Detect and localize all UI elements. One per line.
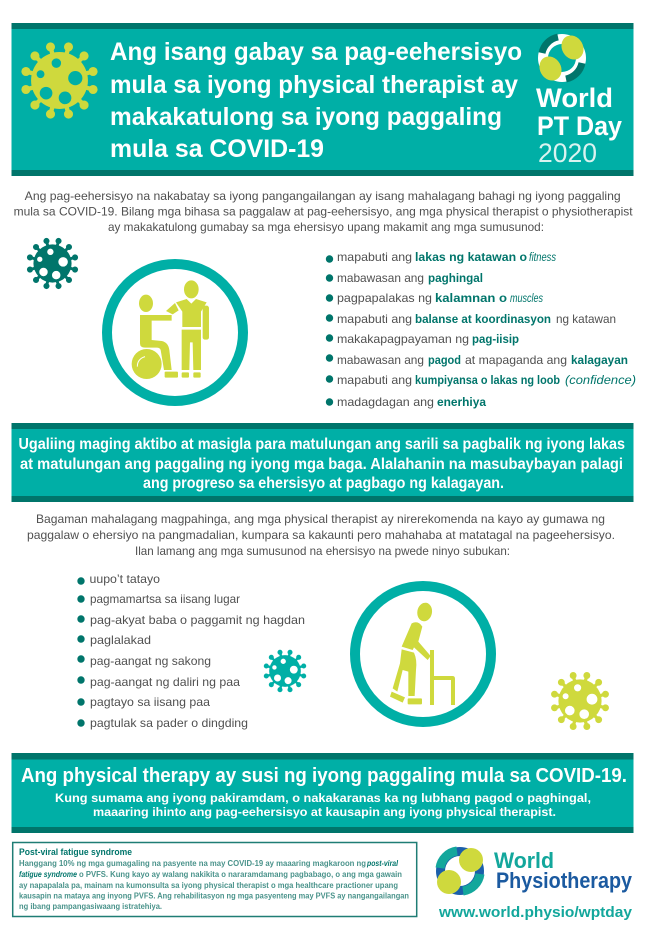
- logo: World Physiotherapy: [436, 847, 633, 895]
- list: exercises: pag-aangat ng sakong: [90, 654, 211, 668]
- body text: fatigue syndrome: [19, 869, 77, 879]
- item: paghingal: [326, 271, 483, 285]
- item: confidence: (confidence): [565, 373, 636, 387]
- logo: World Physiotherapy: World: [494, 848, 554, 873]
- item: balanse: [326, 312, 616, 326]
- intro text: ay makakatulong gumabay sa mga ehersisyo upang makamit ang mga sumusunod:: [108, 220, 544, 234]
- item: paghingal: mabawasan ang: [337, 271, 424, 285]
- panel: key message banner: Kung sumama ang iyong pakiramdam, o nakakaranas ka ng lubhang pagod o paghingal,: [55, 791, 591, 805]
- logo: World Physiotherapy: Physiotherapy: [496, 868, 633, 893]
- item: muscles: pagpapalakas ng: [337, 291, 432, 305]
- icon: person walking with chair in circle: [355, 586, 491, 722]
- text: exercise intro: Bagaman mahalagang magpahinga, ang mga physical therapist ay nirerekomenda na kayo ay gumawa ng: [36, 512, 605, 526]
- item: muscles: muscles: [510, 291, 543, 305]
- item: pagod at kalagayan: kalagayan: [571, 353, 628, 367]
- title: [110, 38, 522, 163]
- item: balanse: balanse at koordinasyon: [415, 312, 551, 326]
- logo: World PT Day 2020: [535, 31, 622, 168]
- intro text: Ang pag-eehersisyo na nakabatay sa iyong pangangailangan ay isang mahalagang bahagi ng iyong paggaling: [25, 189, 621, 203]
- list: benefits: [326, 250, 636, 409]
- text: exercise intro: paggalaw o ehersiyo na pangmadalian, kumpara sa kakaunti pero mahahaba at matatagal na pageehersisyo.: [27, 528, 615, 542]
- heading: Post-viral fatigue syndrome: [19, 847, 132, 857]
- panel: key message banner: [12, 753, 634, 833]
- item: fitness: mapabuti ang: [337, 250, 412, 264]
- item: pag-iisip: makakapagpayaman ng: [337, 332, 469, 346]
- item: muscles: [326, 291, 543, 305]
- item: balanse: ng katawan: [556, 312, 616, 326]
- item: balanse: mapabuti ang: [337, 312, 412, 326]
- icon: therapist with patient in circle: [107, 264, 243, 401]
- text: exercise intro: Ilan lamang ang mga sumusunod na ehersisyo na pwede ninyo subukan:: [135, 544, 510, 558]
- body text: post-viral: [366, 858, 398, 868]
- logo: World PT Day 2020: PT Day: [537, 111, 622, 141]
- title: makakatulong sa iyong paggaling: [110, 103, 502, 131]
- body text: [19, 858, 409, 911]
- item: confidence: [326, 373, 636, 387]
- body text: ng ibang pampangasiwaang istratehiya.: [19, 901, 162, 911]
- body text: o PVFS. Kung kayo ay walang nakikita o nararamdamang pagbabago, o ang mga gawain: [79, 869, 402, 879]
- body text: ay napapalala pa, mainam na kumonsulta sa iyong physical therapist o mga healthcare practioner upang: [19, 880, 398, 890]
- list: exercises: pagtulak sa pader o dingding: [90, 716, 248, 730]
- title: mula sa COVID-19: [110, 135, 324, 163]
- item: pag-iisip: pag-iisip: [472, 332, 519, 346]
- item: confidence: mapabuti ang: [337, 373, 412, 387]
- item: pag-iisip: [326, 332, 519, 346]
- list: exercises: pag-aangat ng daliri ng paa: [90, 675, 240, 689]
- item: muscles: kalamnan o: [435, 291, 507, 305]
- body text: kausapin na mataya ang inyong PVFS. Ang rehabilitasyon ng mga pasyenteng may PVFS ay nangangailangan: [19, 890, 409, 900]
- icon: lime virus lower right: [553, 674, 607, 728]
- panel: key message banner: maaaring ihinto ang pag-eehersisyo at kausapin ang iyong physical therapist.: [93, 805, 556, 819]
- header banner: [12, 23, 634, 176]
- body text: Hanggang 10% ng mga gumagaling na pasyente na may COVID-19 ay maaaring magkaroon ng: [19, 858, 366, 868]
- item: fitness: fitness: [529, 250, 556, 264]
- panel: post-viral fatigue syndrome: [13, 842, 417, 916]
- item: fitness: lakas ng katawan o: [415, 250, 527, 264]
- item: pagod at kalagayan: mabawasan ang: [337, 353, 424, 367]
- icon: lime virus: [24, 45, 95, 116]
- list: exercises: uupo’t tatayo: [90, 572, 160, 586]
- panel: stay active banner: ang progreso sa ehersisyo at pagbago ng kalagayan.: [143, 475, 504, 492]
- title: Ang isang gabay sa pag-eehersisyo: [110, 38, 522, 66]
- panel: stay active banner: [12, 423, 634, 502]
- panel: stay active banner: at matulungan ang paggaling ng iyong mga baga. Alalahanin na masubaybayan palagi: [20, 456, 623, 473]
- item: enerhiya: madagdagan ang: [337, 395, 434, 409]
- intro text: [14, 189, 633, 234]
- item: pagod at kalagayan: [326, 353, 628, 367]
- logo: World PT Day 2020: World: [536, 83, 613, 113]
- item: confidence: kumpiyansa o lakas ng loob: [415, 373, 560, 387]
- icon: teal virus: [265, 651, 305, 691]
- list: exercises: pagtayo sa iisang paa: [90, 695, 210, 709]
- list: exercises: pag-akyat baba o paggamit ng hagdan: [90, 613, 305, 627]
- logo: World PT Day 2020: 2020: [538, 138, 597, 168]
- website link: www.world.physio/wptday: [438, 904, 633, 921]
- item: pagod at kalagayan: at mapaganda ang: [465, 353, 567, 367]
- intro text: mula sa COVID-19. Bilang mga bihasa sa paggalaw at pag-eehersisyo, ang mga physical therapist o physiotherapist: [14, 204, 633, 218]
- icon: dark virus: [28, 239, 77, 288]
- list: exercises: [77, 572, 305, 730]
- list: exercises: pagmamartsa sa iisang lugar: [90, 592, 240, 606]
- item: pagod at kalagayan: pagod: [428, 353, 461, 367]
- list: exercises: paglalakad: [90, 633, 151, 647]
- item: enerhiya: enerhiya: [437, 395, 486, 409]
- item: fitness: [326, 250, 556, 264]
- text: exercise intro: [27, 512, 615, 558]
- item: enerhiya: [326, 395, 486, 409]
- title: mula sa iyong physical therapist ay: [110, 71, 518, 99]
- item: paghingal: paghingal: [428, 271, 483, 285]
